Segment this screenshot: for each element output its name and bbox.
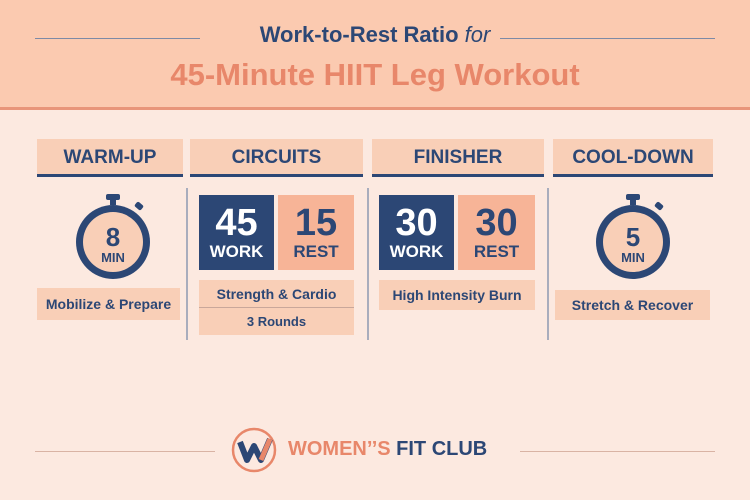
heading: cool-down — [553, 139, 713, 177]
circuits rest — [278, 195, 354, 270]
finisher work: WORK — [390, 242, 443, 260]
circuits label: 3 Rounds — [247, 314, 306, 329]
finisher label: High Intensity Burn — [392, 287, 522, 303]
circuits work: WORK — [210, 242, 263, 260]
icon: stopwatch 5 min: MIN — [621, 250, 645, 265]
circuits label: Strength & Cardio — [217, 286, 336, 302]
circuits rest: 15 — [295, 202, 337, 244]
finisher label — [379, 280, 535, 310]
heading: circuits — [190, 139, 363, 177]
footer logo — [232, 428, 487, 472]
icon: stopwatch 8 min — [76, 194, 150, 279]
title line 2: 45-Minute HIIT Leg Workout — [170, 57, 580, 92]
label: mobilize — [37, 288, 180, 320]
label: stretch — [555, 290, 710, 320]
circuits work: 45 — [215, 202, 258, 244]
finisher work — [379, 195, 454, 270]
finisher work: 30 — [395, 202, 438, 244]
heading: finisher: FINISHER — [414, 147, 502, 168]
heading: finisher — [372, 139, 544, 177]
finisher rest: REST — [474, 242, 519, 260]
label: mobilize: Mobilize & Prepare — [46, 296, 171, 312]
heading: warm-up: WARM-UP — [64, 147, 156, 168]
finisher rest — [458, 195, 535, 270]
icon: W logo — [232, 428, 276, 472]
icon: stopwatch 5 min: 5 — [626, 222, 640, 252]
icon: stopwatch 8 min: 8 — [106, 222, 120, 252]
heading: circuits: CIRCUITS — [232, 147, 321, 168]
label: stretch: Stretch & Recover — [572, 297, 693, 313]
finisher rest: 30 — [475, 202, 518, 244]
icon: stopwatch 8 min: MIN — [101, 250, 125, 265]
circuits rest: REST — [293, 242, 339, 260]
header band — [0, 0, 750, 110]
circuits work — [199, 195, 274, 270]
heading: warm-up — [37, 139, 183, 177]
brand text: WOMEN’’S FIT CLUB — [288, 438, 487, 460]
circuits label — [199, 280, 354, 335]
title line 1: Work-to-Rest Ratio for — [260, 22, 490, 47]
heading: cool-down: COOL-DOWN — [572, 147, 694, 168]
icon: stopwatch 5 min — [596, 194, 670, 279]
